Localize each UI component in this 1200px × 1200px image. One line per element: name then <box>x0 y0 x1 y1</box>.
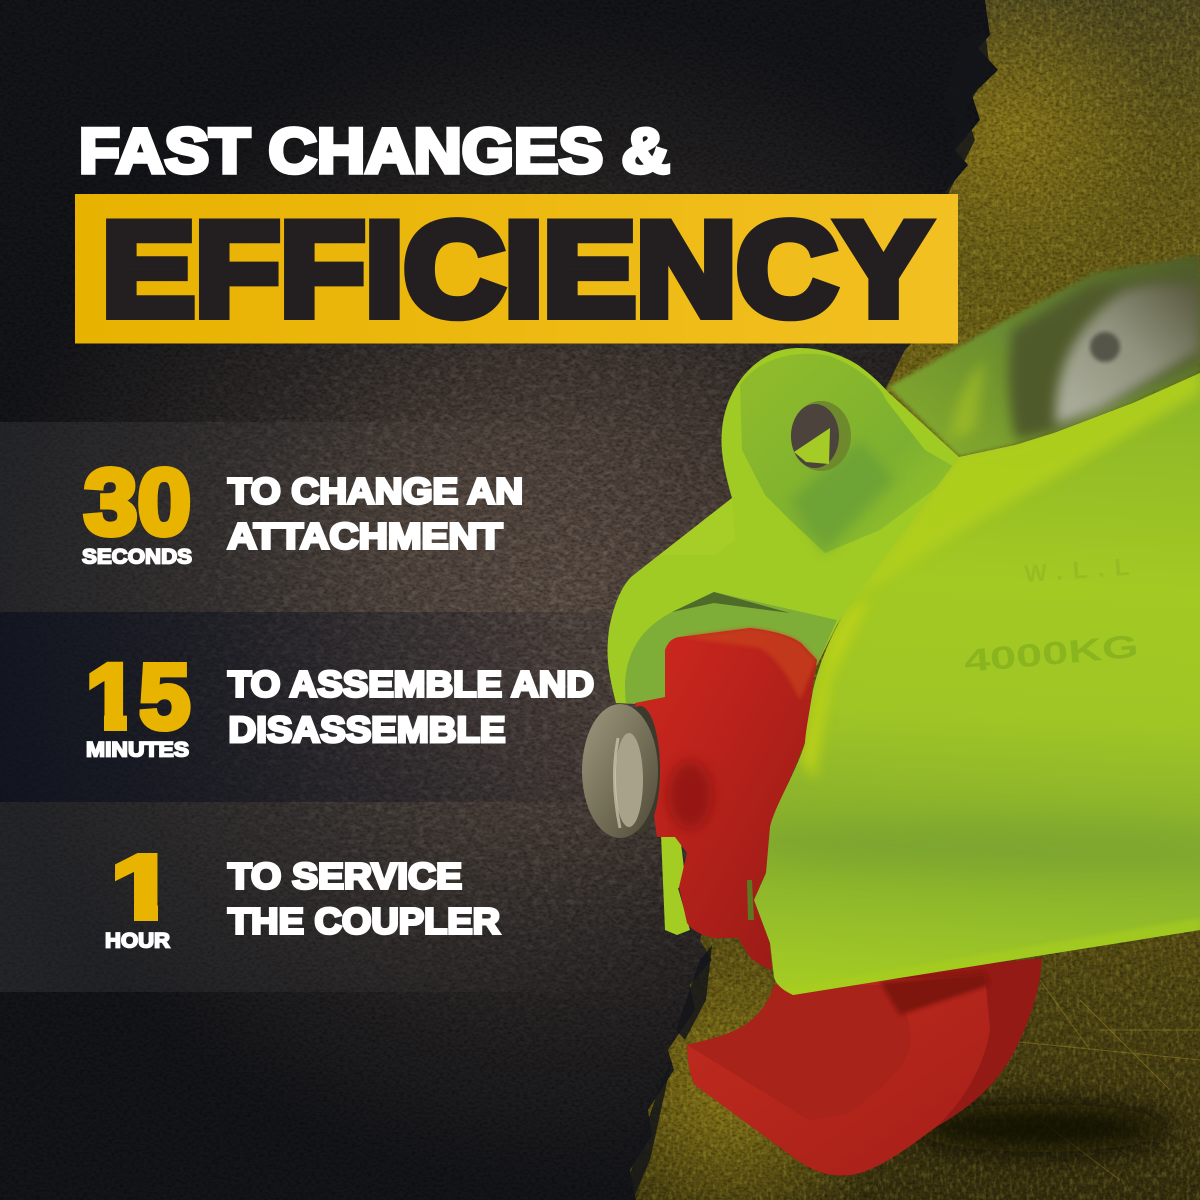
red clamp <box>635 628 817 970</box>
coupler illustration <box>582 255 1200 1175</box>
small green tab behind red clamp <box>661 835 690 935</box>
stat: 30 seconds: ATTACHMENT <box>228 516 502 556</box>
lug and flange <box>607 348 1000 705</box>
stat: 30 seconds: TO CHANGE AN <box>228 470 523 512</box>
stat: 30 seconds: SECONDS <box>82 544 192 568</box>
stat: 15 minutes: 1 <box>86 646 137 748</box>
stat bands <box>0 422 690 992</box>
stat: 1 hour: 1 <box>111 838 175 938</box>
jaw opening <box>625 592 837 705</box>
red lower hook <box>687 958 1042 1175</box>
stat: 15 minutes: DISASSEMBLE <box>228 709 506 750</box>
stat: 30 seconds <box>82 450 523 568</box>
cast marking: W.L.L <box>1024 554 1130 588</box>
headline banner: EFFICIENCY <box>102 196 930 344</box>
stat: 30 seconds: 30 <box>84 450 191 554</box>
stat: 15 minutes: 5 <box>139 646 190 748</box>
stat: 1 hour <box>106 853 502 948</box>
lug hole <box>791 401 851 471</box>
stat: 1 hour: HOUR <box>105 928 170 952</box>
cast marking: 4000KG <box>962 628 1140 679</box>
upper arm with eye <box>888 255 1200 457</box>
stat: 15 minutes <box>86 662 594 758</box>
main body <box>754 365 1200 1000</box>
ground shadow <box>910 1104 1170 1152</box>
stat: 15 minutes: TO ASSEMBLE AND <box>228 664 594 704</box>
title line: FAST CHANGES & <box>79 117 670 187</box>
stat: 1 hour: THE COUPLER <box>228 900 500 942</box>
stat: 1 hour: TO SERVICE <box>228 856 462 896</box>
stat: 15 minutes: MINUTES <box>86 738 189 762</box>
background: yellow painted grunge region <box>600 0 1200 1200</box>
steel bolt <box>582 704 660 838</box>
